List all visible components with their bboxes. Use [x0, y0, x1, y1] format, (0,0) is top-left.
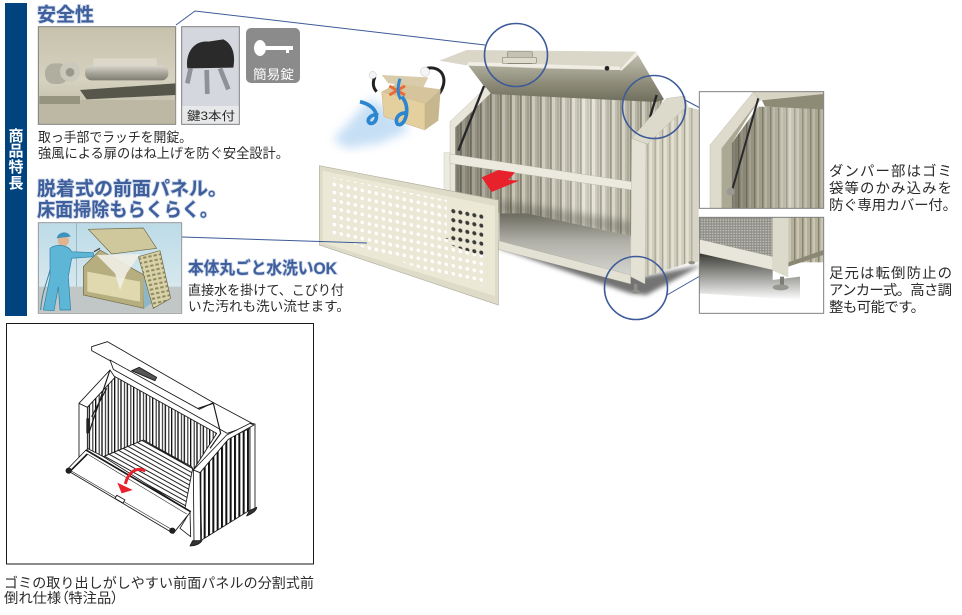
- front floor rail: [498, 241, 631, 284]
- text: damper note: ダンパー部はゴミ: [829, 162, 952, 180]
- heading: removable front panel: 脱着式の前面パネル。: [37, 178, 227, 200]
- sidebar: product features: [5, 3, 27, 316]
- text: anchor note: 足元は転倒防止の: [829, 265, 952, 282]
- illustration: wind mascot box: [333, 67, 444, 148]
- highlight circle: damper: [622, 76, 686, 138]
- left door post: [444, 153, 450, 192]
- photo: three keys: 鍵3本付: [187, 109, 235, 123]
- text: safety description: 取っ手部でラッチを開錠。: [38, 130, 192, 145]
- sidebar: product features: 商: [8, 128, 24, 145]
- text: safety description: [38, 130, 289, 161]
- text: anchor note: 整も可能です。: [829, 299, 925, 316]
- shed: main product photo: [319, 50, 702, 305]
- text: washing description: 直接水を掛けて、こびり付: [188, 283, 344, 298]
- heading: removable front panel: [37, 178, 227, 221]
- sidebar: product features: 品: [8, 143, 24, 160]
- caption: split front panel: [4, 575, 314, 607]
- perforated front panel: [319, 166, 498, 305]
- right edge post: [693, 108, 699, 263]
- gable cover: [632, 96, 687, 144]
- floor: [499, 213, 631, 276]
- feet: [631, 261, 695, 294]
- text: anchor note: [829, 265, 952, 316]
- heading: safety: 安全性: [37, 4, 94, 26]
- text: damper note: 防ぐ専用カバー付。: [829, 197, 957, 214]
- line art: shed with front door folded down: [66, 342, 257, 546]
- text: anchor note: アンカー式。高さ調: [829, 282, 952, 299]
- leader line: foot circle to detail: [667, 276, 700, 295]
- highlight circle: handle: [484, 24, 548, 86]
- sidebar: product features: 特: [8, 158, 24, 176]
- front right post: [631, 138, 646, 284]
- cross bar: [450, 154, 632, 190]
- text: washing description: いた汚れも洗い流せます。: [188, 299, 350, 314]
- leader line: damper circle to detail: [685, 100, 702, 109]
- left gable frame: [450, 87, 491, 197]
- text: safety description: 強風による扉のはね上げを防ぐ安全設計。: [38, 146, 289, 161]
- photo: door lock handle: [38, 27, 176, 124]
- text: damper note: 袋等のかみ込みを: [829, 179, 952, 197]
- text: damper note: [829, 162, 957, 214]
- heading: fully washable: 本体丸ごと水洗いOK: [188, 258, 338, 278]
- dampers: [458, 86, 657, 151]
- lid underside: [468, 52, 664, 102]
- sidebar: product features: 長: [8, 175, 24, 192]
- photo illustration: washing the shed: [38, 223, 182, 313]
- leader line: wash to panel: [182, 237, 367, 243]
- lid handle: [502, 52, 536, 64]
- panel: split front door line drawing: [6, 324, 314, 564]
- icon: simple lock key: 簡易錠: [253, 67, 294, 82]
- detail photo: damper cover: [699, 92, 824, 208]
- highlight circle: foot: [604, 256, 668, 320]
- photo: three keys: [182, 27, 239, 124]
- red arrow: [482, 170, 519, 192]
- arrow: red fold direction: [117, 469, 145, 493]
- back corrugated wall: [450, 93, 663, 237]
- heading: removable front panel: 床面掃除もらくらく。: [37, 198, 218, 221]
- leader line: safety to lid handle: [176, 11, 485, 45]
- lid top: [439, 50, 636, 70]
- text: washing description: [188, 283, 350, 314]
- right side wall: [645, 107, 699, 277]
- ground shadow: [500, 245, 702, 295]
- icon: simple lock key: [246, 28, 300, 83]
- caption: split front panel: 倒れ仕様（特注品）: [4, 590, 118, 607]
- detail photo: anchor foot: [699, 217, 824, 313]
- caption: split front panel: ゴミの取り出しがしやすい前面パネルの分割式前: [4, 575, 314, 591]
